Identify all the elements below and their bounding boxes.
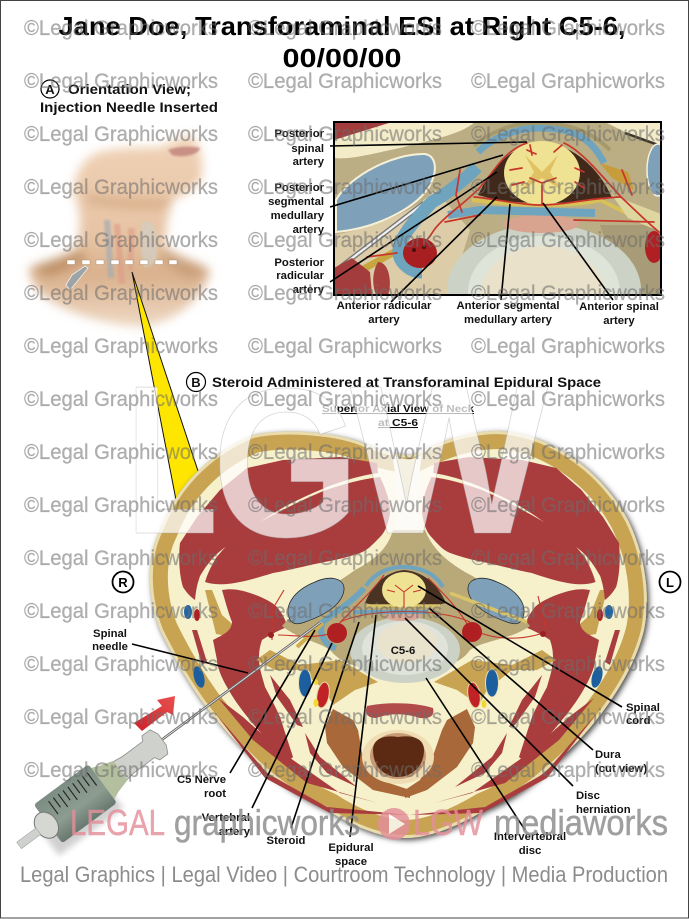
watermark: repeated copyright grid: ©Legal Graphicworks <box>471 759 665 782</box>
thyroid lobes <box>325 709 410 798</box>
labels: inset arteries: segmental <box>268 196 324 208</box>
panel: inset magnified spinal canal <box>335 123 660 294</box>
inset lower left tissue <box>334 190 470 295</box>
inset epidural dark space <box>478 148 612 203</box>
spinal needle shaft <box>161 622 321 741</box>
inset needle <box>334 203 424 272</box>
lateral tan fascia <box>205 590 250 640</box>
watermark: repeated copyright grid: ©Legal Graphicworks <box>248 335 442 358</box>
illustration: superior axial section of neck <box>150 431 649 840</box>
watermark: repeated copyright grid: ©Legal Graphicworks <box>24 176 218 199</box>
axial view subtitle <box>322 403 474 429</box>
inset disc <box>447 228 641 294</box>
labels: axial section: Spinal <box>93 628 127 640</box>
leader lines: inset <box>330 142 613 302</box>
inset vertebral arteries <box>403 238 437 268</box>
labels: axial section: Vertebral <box>202 812 250 824</box>
labels: inset arteries: radicular <box>276 270 325 282</box>
watermark: repeated copyright grid: ©Legal Graphicworks <box>471 547 665 570</box>
watermark: repeated copyright grid: ©Legal Graphicworks <box>24 706 218 729</box>
labels: axial section: Dura <box>595 749 621 761</box>
paraspinal connective tissue <box>282 530 530 668</box>
watermark: repeated copyright grid: ©Legal Graphicworks <box>471 335 665 358</box>
axial view subtitle: at C5-6 <box>378 417 418 429</box>
labels: axial section: artery <box>219 826 251 838</box>
disc herniation <box>385 611 421 621</box>
left side marker: L <box>666 575 674 590</box>
labels: axial section: cord <box>626 715 651 727</box>
central ligament <box>392 454 422 532</box>
labels: axial section: herniation <box>576 804 631 816</box>
neck vessels <box>184 605 613 709</box>
watermark: large LGW: W <box>350 341 548 578</box>
labels: axial section: C5 Nerve <box>177 774 226 786</box>
watermark: large LGW: L <box>126 341 218 578</box>
watermark: repeated copyright grid: ©Legal Graphicworks <box>471 17 665 40</box>
labels: inset arteries: artery <box>293 156 325 168</box>
labels: inset arteries: Anterior radicular <box>337 300 432 312</box>
labels: inset arteries: artery <box>603 315 635 327</box>
cord arteries <box>272 575 546 640</box>
section B heading: Steroid Administered at Transforaminal Epidural Space <box>212 374 601 390</box>
labels: inset arteries: medullary <box>271 210 325 222</box>
section B heading: B <box>191 375 201 390</box>
section A heading: Injection Needle Inserted <box>40 99 218 115</box>
graduation marks <box>49 773 97 814</box>
labels: inset arteries: Posterior <box>274 257 325 269</box>
watermark: repeated copyright grid: ©Legal Graphicworks <box>24 494 218 517</box>
laryngeal muscle <box>366 703 433 718</box>
labels: inset arteries: Posterior <box>274 128 325 140</box>
watermark: repeated copyright grid: ©Legal Graphicworks <box>248 547 442 570</box>
title: Jane Doe, Transforaminal ESI at Right C5-6, <box>58 11 626 41</box>
watermark: repeated copyright grid: ©Legal Graphicworks <box>471 441 665 464</box>
labels: inset arteries: artery <box>368 314 400 326</box>
labels: inset arteries: artery <box>293 224 325 236</box>
watermark: repeated copyright grid: ©Legal Graphicworks <box>471 706 665 729</box>
labels: axial section: root <box>204 788 226 800</box>
green neck <box>85 753 133 805</box>
watermark: repeated copyright grid: ©Legal Graphicworks <box>248 388 442 411</box>
watermark: repeated copyright grid: ©Legal Graphicworks <box>24 600 218 623</box>
inset herniation <box>503 215 579 233</box>
logo: legal graphicworks: graphicworks <box>174 802 360 843</box>
trachea <box>362 730 434 784</box>
inset lower right tissue <box>600 225 661 295</box>
logo: lgw mediaworks: LGW <box>413 802 483 843</box>
watermark: repeated copyright grid: ©Legal Graphicworks <box>471 176 665 199</box>
dura mater <box>366 567 443 587</box>
illustration: neck orientation view <box>29 135 210 327</box>
section A heading <box>40 80 218 115</box>
watermark: repeated copyright grid: ©Legal Graphicworks <box>248 653 442 676</box>
labels: axial section: Steroid <box>267 835 306 847</box>
labels: inset arteries: Anterior segmental <box>457 300 559 312</box>
labels: axial section: C5-6 <box>391 645 415 657</box>
clear hub <box>107 727 171 786</box>
watermark: repeated copyright grid: ©Legal Graphicworks <box>471 653 665 676</box>
title: 00/00/00 <box>282 43 402 73</box>
inset frame <box>334 122 661 295</box>
labels: inset arteries: spinal <box>291 143 324 155</box>
muscles right side anterior <box>410 589 620 815</box>
lips <box>168 147 200 156</box>
dashed axial plane marker <box>67 260 177 264</box>
labels: axial section: Spinal <box>626 702 660 714</box>
small syringe <box>66 266 88 290</box>
watermark: repeated copyright grid: ©Legal Graphicworks <box>24 70 218 93</box>
muscles right side posterior <box>422 457 620 600</box>
labels: axial section: Epidural <box>328 842 374 854</box>
inset spinal cord <box>504 141 580 205</box>
watermark: repeated copyright grid: ©Legal Graphicworks <box>248 494 442 517</box>
right side marker <box>112 572 134 592</box>
watermark: repeated copyright grid: ©Legal Graphicworks <box>24 653 218 676</box>
cream base <box>150 431 647 838</box>
yellow ligament and nerve <box>366 593 527 622</box>
labels: axial section <box>92 628 660 868</box>
inset dura bands <box>478 128 604 163</box>
logo: lgw mediaworks <box>378 802 668 843</box>
watermark: repeated copyright grid: ©Legal Graphicworks <box>471 494 665 517</box>
labels: axial section: needle <box>92 641 128 653</box>
watermark: repeated copyright grid: ©Legal Graphicworks <box>248 176 442 199</box>
watermark: repeated copyright grid: ©Legal Graphicworks <box>248 759 442 782</box>
syringe with needle <box>5 603 340 871</box>
labels: axial section: Disc <box>576 790 600 802</box>
vertebral arteries <box>327 623 347 643</box>
inset arteries <box>367 143 659 257</box>
tan fascia near vessels <box>256 650 378 705</box>
section A heading: A <box>45 82 55 97</box>
watermark: repeated copyright grid: ©Legal Graphicworks <box>24 441 218 464</box>
watermark: repeated copyright grid: ©Legal Graphicworks <box>24 547 218 570</box>
section drop shadow <box>152 433 649 840</box>
blue muscle left <box>288 578 344 624</box>
watermark: repeated copyright grid: ©Legal Graphicworks <box>24 123 218 146</box>
labels: inset arteries: artery <box>293 284 325 296</box>
watermark: large LGW <box>126 341 548 581</box>
watermark: repeated copyright grid: ©Legal Graphicworks <box>471 123 665 146</box>
subcutaneous fat ring <box>150 431 647 838</box>
muscles left side <box>179 457 410 815</box>
watermark: repeated copyright grid: ©Legal Graphicworks <box>471 600 665 623</box>
watermark: repeated copyright grid: ©Legal Graphicworks <box>24 17 218 40</box>
inset blue muscle left <box>336 154 435 232</box>
watermark: repeated copyright grid: ©Legal Graphicworks <box>248 282 442 305</box>
yellow callout pointer <box>132 272 201 500</box>
labels: axial section: space <box>335 856 367 868</box>
labels: axial section: disc <box>519 845 541 857</box>
leader lines: axial section <box>132 586 622 837</box>
epidural dark space <box>365 570 446 608</box>
watermark: repeated copyright grid: ©Legal Graphicworks <box>471 70 665 93</box>
watermark: repeated copyright grid: ©Legal Graphicworks <box>248 123 442 146</box>
labels: inset arteries: Posterior <box>274 182 325 194</box>
spinal cord <box>382 572 426 608</box>
labels: axial section: Intervertebral <box>494 831 566 843</box>
axial view subtitle: Superior Axial View of Neck <box>322 403 474 415</box>
logo: legal graphicworks: LEGAL <box>70 802 165 843</box>
barrel <box>34 764 117 843</box>
watermark: repeated copyright grid: ©Legal Graphicworks <box>24 759 218 782</box>
watermark: repeated copyright grid: ©Legal Graphicworks <box>471 282 665 305</box>
watermark: repeated copyright grid: ©Legal Graphicworks <box>248 441 442 464</box>
watermark: repeated copyright grid: ©Legal Graphicworks <box>24 282 218 305</box>
watermark: repeated copyright grid: ©Legal Graphicworks <box>248 17 442 40</box>
watermark: repeated copyright grid: ©Legal Graphicworks <box>24 388 218 411</box>
inset lower muscle <box>334 258 372 295</box>
right side marker: R <box>118 575 128 590</box>
blue muscle right <box>468 578 524 624</box>
inset upper soft tissue <box>334 122 475 158</box>
syringe shadow <box>35 776 123 856</box>
inset ligaments <box>472 198 626 215</box>
watermark: repeated copyright grid: ©Legal Graphicworks <box>248 70 442 93</box>
watermark: repeated copyright grid: ©Legal Graphicworks <box>471 229 665 252</box>
watermark: repeated copyright grid: ©Legal Graphicworks <box>248 706 442 729</box>
watermark: repeated copyright grid: ©Legal Graphicworks <box>24 335 218 358</box>
title <box>58 11 626 73</box>
watermark: repeated copyright grid <box>24 17 665 782</box>
labels: axial section: (cut view) <box>595 763 647 775</box>
red direction arrow <box>134 696 175 731</box>
watermark: repeated copyright grid: ©Legal Graphicworks <box>471 388 665 411</box>
inset nerve root <box>362 249 393 270</box>
logo: legal graphicworks <box>70 802 360 843</box>
labels: inset arteries: Anterior spinal <box>579 301 659 313</box>
watermark: large LGW: G <box>212 344 360 581</box>
section A heading: Orientation View; <box>68 81 191 97</box>
logo: lgw mediaworks: mediaworks <box>494 802 668 843</box>
neck structures <box>104 220 157 284</box>
labels: inset arteries: medullary artery <box>464 314 553 326</box>
intervertebral disc <box>350 617 460 683</box>
watermark: repeated copyright grid: ©Legal Graphicworks <box>248 229 442 252</box>
watermark: repeated copyright grid: ©Legal Graphicworks <box>24 229 218 252</box>
plunger disc <box>29 807 64 843</box>
labels: inset arteries <box>268 128 659 327</box>
plunger rod <box>17 828 41 849</box>
inset blue muscle right <box>646 143 660 197</box>
left side marker <box>660 572 680 592</box>
watermark: repeated copyright grid: ©Legal Graphicworks <box>248 600 442 623</box>
